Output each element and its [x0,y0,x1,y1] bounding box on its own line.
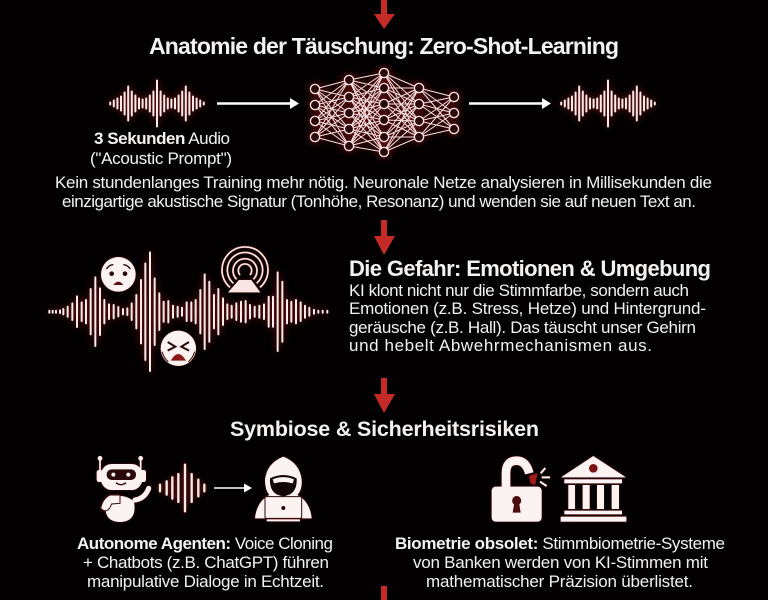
text: Biometrie obsolet: Biometrie obsolet: Stimmbiometrie-Systeme [395,534,725,553]
icon: robot [97,456,149,522]
title: Anatomie: Anatomie der Täuschung: Zero-Shot-Learning [149,33,619,59]
text: explanation: Kein stundenlanges Training mehr nötig. Neuronale Netze analysieren in Millisekunden die [55,173,712,192]
icon: crying face [161,331,196,366]
icon: neural network [310,68,459,157]
arrow: bottom [381,586,387,600]
icon: broken lock [492,461,550,522]
icon: output waveform [561,80,655,126]
icon: small waveform [160,465,204,511]
text: explanation: einzigartige akustische Signatur (Tonhöhe, Resonanz) und wenden sie auf neuen Text an. [62,192,696,211]
label: 3 Sekunden Audio [90,129,232,168]
text: Biometrie obsolet: von Banken werden von KI-Stimmen mit [413,553,708,572]
text: Autonome Agenten: + Chatbots (z.B. ChatGPT) führen [83,553,329,572]
text: Autonome Agenten [77,534,333,591]
arrow: third [374,378,395,413]
text: explanation [55,173,712,211]
icon: reverb signal [222,247,268,292]
arrow: robot to hacker [214,484,252,492]
icon: emotional waveform [49,252,327,371]
label: 3 Sekunden Audio: 3 Sekunden Audio [94,129,230,148]
icon: input waveform [110,80,204,126]
text: danger description: und hebelt Abwehrmechanismen aus. [349,336,652,355]
icon: worried face [101,257,136,292]
arrow: top [374,0,395,29]
text: Autonome Agenten: manipulative Dialoge in Echtzeit. [87,572,324,591]
text: danger description: KI klont nicht nur die Stimmfarbe, sondern auch [349,281,689,300]
heading: Symbiose: Symbiose & Sicherheitsrisiken [230,417,539,441]
arrow: second [374,220,395,255]
text: danger description: geräusche (z.B. Hall). Das täuscht unser Gehirn [349,318,696,337]
text: Biometrie obsolet: mathematischer Präzision überlistet. [426,572,693,591]
icon: hacker [255,457,312,521]
text: danger description [349,281,706,355]
icon: bank [561,456,626,522]
heading: Die Gefahr: Die Gefahr: Emotionen & Umgebung [349,256,711,281]
arrow: to output waveform [469,98,551,109]
text: Autonome Agenten: Autonome Agenten: Voice Cloning [77,534,333,553]
label: 3 Sekunden Audio: ("Acoustic Prompt") [90,149,232,168]
arrow: to neural network [217,98,299,109]
text: Biometrie obsolet [395,534,725,591]
text: danger description: Emotionen (z.B. Stress, Hetze) und Hintergrund- [349,299,706,318]
